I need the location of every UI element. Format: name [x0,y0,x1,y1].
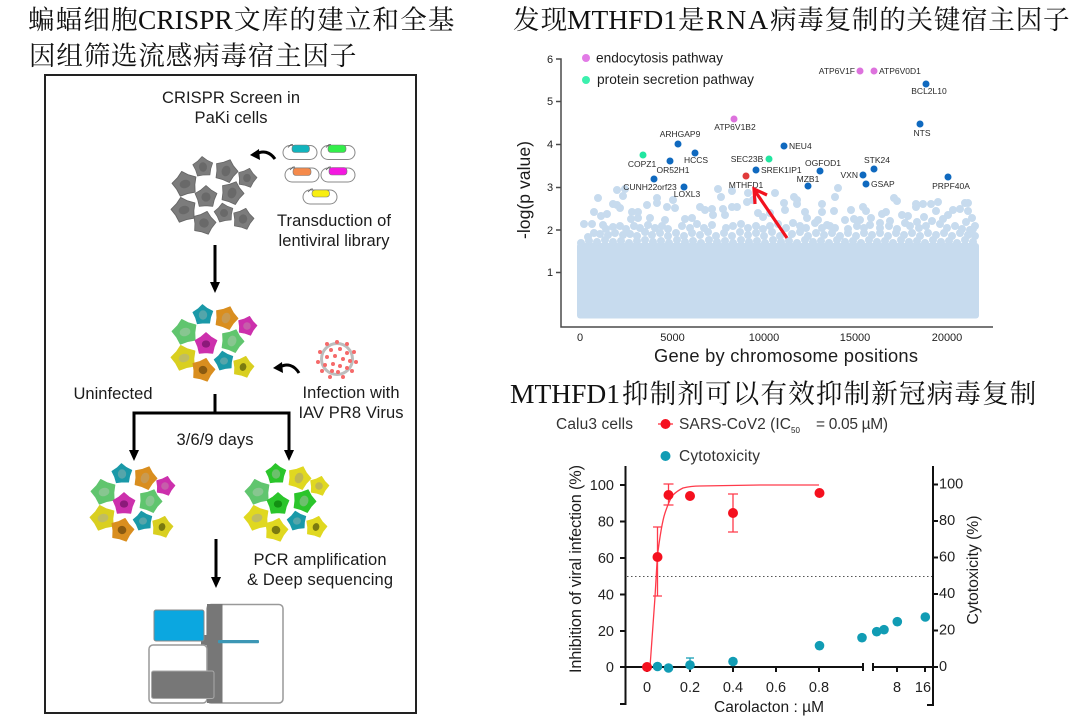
x tick labels [643,680,931,696]
legend: endocytosis pathway [596,50,723,66]
highlighted genes: PRPF40A [932,181,970,191]
text: PCR amplification & Deep sequencing [247,551,393,589]
icon: lentiviral plasmid library [283,144,355,204]
legend [556,416,888,465]
axes [620,466,938,705]
icon: IAV PR8 virus particle [316,340,358,379]
highlighted genes: ATP6V1B2 [714,122,756,132]
text: Uninfected: Uninfected [74,385,152,403]
series: SARS-CoV2 inhibition [642,488,824,672]
x axis tick labels: 15000 [840,332,870,344]
highlighted genes: COPZ1 [628,159,656,169]
icon: uninfected cell population [88,463,177,542]
legend: protein secretion pathway [597,72,754,87]
right tick labels: 80 [939,513,955,529]
text: Infection with IAV PR8 Virus: IAV PR8 Virus [298,404,404,422]
chart: Manhattan plot [514,50,993,366]
highlighted genes: NTS [914,128,931,138]
icon: curved arrow from virus [273,362,299,373]
x tick labels: 0 [643,680,651,696]
x tick labels: 8 [893,680,901,696]
text: PCR amplification & Deep sequencing: PCR amplification [254,551,386,569]
highlighted genes: STK24 [864,155,890,165]
text: CRISPR Screen in PaKi cells [162,89,300,127]
y axis tick labels [547,54,553,279]
title: MTHFD1 heading: 发现 [513,5,568,35]
title: MTHFD1 heading: MTHFD1 [567,4,677,35]
highlighted genes: OR52H1 [656,165,690,175]
highlighted genes: BCL2L10 [911,86,947,96]
title: inhibitor heading: MTHFD1 [510,378,620,409]
highlighted genes: CUNH22orf23 [623,182,677,192]
left tick labels: 100 [590,478,614,494]
highlighted genes: SEC23B [731,154,764,164]
y axis tick labels: 1 [547,267,553,279]
icon: grey PaKi cells [169,156,259,235]
arrow: branching arrows [129,394,294,461]
title: left heading [28,4,456,71]
title: left heading: CRISPR [138,4,233,35]
right tick labels: 0 [939,659,947,675]
y axis tick labels: 5 [547,96,553,108]
text: 3/6/9 days: 3/6/9 days [176,431,254,449]
x axis title: Carolacton : µM [714,699,824,716]
curve and error bars [650,484,819,667]
title: inhibitor heading: 抑制剂可以有效抑制新冠病毒复制 [622,379,1038,409]
right tick labels: 100 [939,476,963,492]
panel: CRISPR screen workflow [45,75,416,713]
highlighted genes: GSAP [871,179,895,189]
chart: dose response [556,416,982,716]
right tick labels [939,476,963,675]
highlighted genes: MTHFD1 [729,180,763,190]
x tick labels: 0.2 [680,680,700,696]
left tick labels: 80 [598,514,614,530]
title: MTHFD1 heading: 是 [678,5,706,35]
highlighted genes: OGFOD1 [805,158,841,168]
x axis tick labels [577,332,962,344]
highlighted genes: LOXL3 [674,189,701,199]
text: PCR amplification & Deep sequencing: & Deep sequencing [247,571,393,589]
x tick labels: 16 [915,680,931,696]
x axis tick labels: 0 [577,332,583,344]
x axis title: Gene by chromosome positions [654,345,918,366]
title: left heading: 文库的建立和全基 [234,5,456,35]
right tick labels: 40 [939,586,955,602]
axes [556,59,993,327]
arrow: cells to transduced cells [210,245,220,293]
y axis title: -log(p value) [514,141,534,239]
series: cytotoxicity [653,612,930,673]
y axis tick labels: 6 [547,54,553,66]
legend: = 0.05 µM) [816,416,888,433]
left tick labels [590,478,614,676]
legend: Calu3 cells [556,416,633,433]
x axis tick labels: 5000 [660,332,685,344]
x axis tick labels: 10000 [749,332,779,344]
highlighted genes: ATP6V0D1 [879,66,921,76]
text: Transduction of lentiviral library [277,212,391,250]
left tick labels: 60 [598,551,614,567]
highlighted genes: SREK1IP1 [761,165,802,175]
left tick labels: 20 [598,624,614,640]
legend [582,50,754,87]
x tick labels: 0.4 [723,680,743,696]
legend: Cytotoxicity [679,448,760,465]
right tick labels: 60 [939,550,955,566]
left tick labels: 0 [606,660,614,676]
scatter: all genes [577,188,979,318]
title: left heading: 因组筛选流感病毒宿主因子 [29,41,357,71]
y axis tick labels: 2 [547,225,553,237]
highlighted genes: HCCS [684,155,708,165]
text: CRISPR Screen in PaKi cells: CRISPR Screen in [162,89,300,107]
y axis tick labels: 3 [547,182,553,194]
text: Infection with IAV PR8 Virus: Infection with [302,384,400,402]
legend: SARS-CoV2 (IC [679,416,791,433]
dashed 50 percent line [627,576,933,578]
left tick labels: 40 [598,588,614,604]
title: left heading: 蝙蝠细胞 [28,5,139,35]
highlighted genes: MZB1 [797,174,820,184]
x axis tick labels: 20000 [932,332,962,344]
y axis tick labels: 4 [547,139,553,151]
x tick labels: 0.6 [766,680,786,696]
highlighted genes: NEU4 [789,141,812,151]
icon: curved arrow to cells [250,149,275,160]
text: Infection with IAV PR8 Virus [298,384,404,422]
highlighted genes: VXN [841,170,858,180]
legend: 50 [791,426,800,435]
x tick labels: 0.8 [809,680,829,696]
y axis title left: Inhibition of viral infection (%) [567,465,585,673]
highlighted genes [623,66,970,199]
arrow: red pointer to MTHFD1 [754,189,787,238]
icon: transduced coloured cells [169,303,259,382]
highlighted genes: ARHGAP9 [660,129,701,139]
y axis title right: Cytotoxicity (%) [965,516,982,624]
title: MTHFD1 heading: RNA [706,4,770,35]
icon: infected cell population [242,463,331,542]
icon: sequencer [149,604,283,703]
title: MTHFD1 heading: 病毒复制的关键宿主因子 [770,5,1070,35]
text: Transduction of lentiviral library: Transduction of [277,212,391,230]
right tick labels: 20 [939,622,955,638]
arrow: to sequencing [211,539,221,588]
text: CRISPR Screen in PaKi cells: PaKi cells [194,109,268,127]
text: Transduction of lentiviral library: lentiviral library [278,232,390,250]
highlighted genes: ATP6V1F [819,66,855,76]
